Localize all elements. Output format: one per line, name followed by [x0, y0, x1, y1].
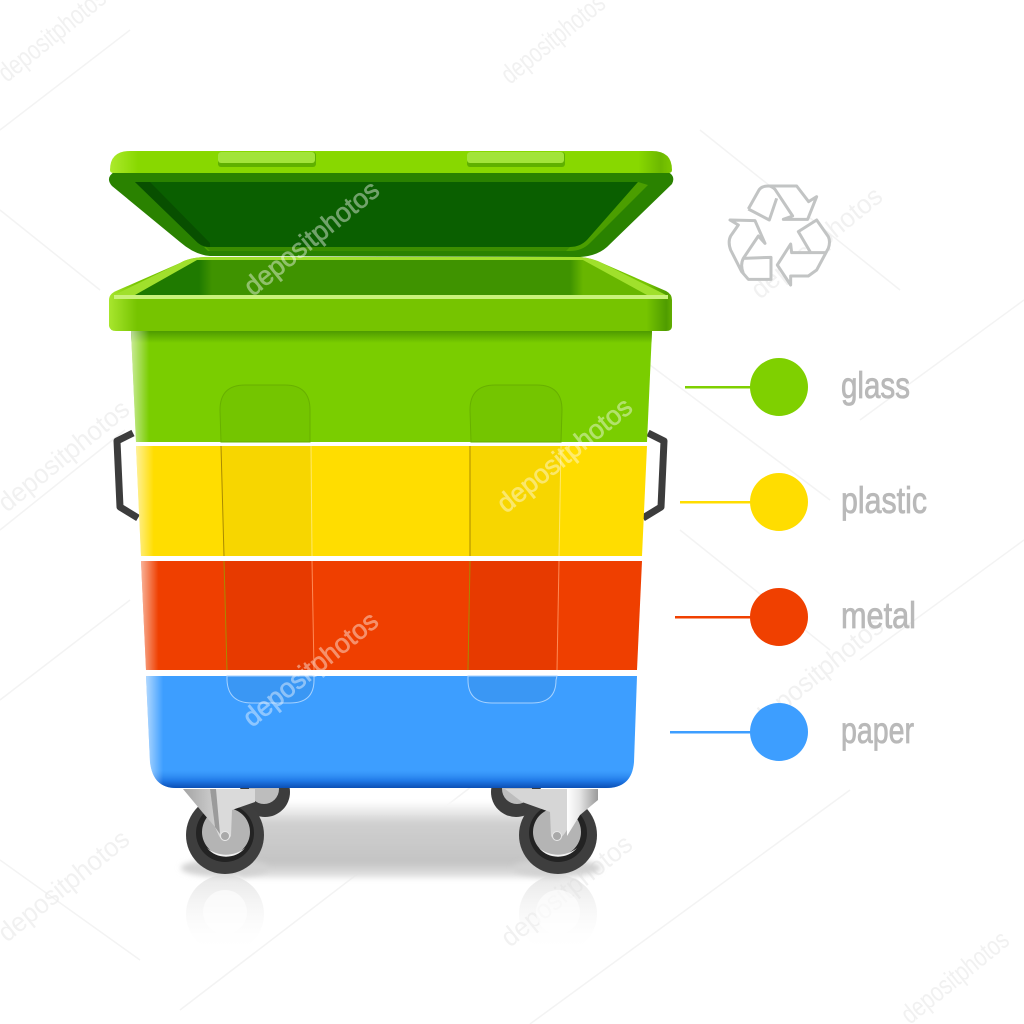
lid underside: [109, 172, 673, 257]
band: paper: [140, 676, 640, 788]
band: glass: [131, 331, 652, 442]
bin watermarks: depositphotos: [491, 392, 638, 519]
band: metal: [141, 561, 642, 670]
bin body: [131, 331, 652, 788]
floor shadow: [181, 802, 601, 878]
wheel reflections: [186, 875, 597, 953]
legend: paper: paper: [841, 710, 914, 751]
legend: metal: metal: [841, 595, 916, 636]
recessed panel right: [468, 385, 562, 703]
lid tab right: [467, 152, 565, 167]
legend: metal: [675, 588, 916, 646]
legend: paper: [670, 703, 914, 761]
bin watermarks: depositphotos: [238, 175, 385, 302]
background watermark: depositphotos: [495, 829, 638, 953]
legend: glass: [685, 358, 910, 416]
lid top rim: [110, 151, 672, 173]
lid inner panel: [135, 182, 638, 247]
bin watermarks: [237, 175, 638, 733]
background watermark: depositphotos: [745, 181, 888, 305]
icon: recycle symbol: [729, 186, 829, 285]
legend: plastic: [680, 473, 927, 531]
band: plastic: [136, 446, 647, 556]
legend: plastic: plastic: [841, 480, 927, 521]
lid tab left: [218, 152, 316, 167]
recessed panel left: [220, 385, 314, 703]
open lid: [109, 151, 673, 257]
background watermark: depositphotos: [746, 611, 889, 735]
front caster right: [505, 789, 598, 874]
side handle left: [117, 433, 138, 518]
rear casters: [240, 767, 541, 817]
bin watermarks: depositphotos: [237, 606, 384, 733]
legend: glass: glass: [841, 365, 910, 406]
front caster left: [183, 789, 264, 874]
side handle right: [643, 433, 664, 518]
bin opening and rim: [109, 257, 672, 331]
